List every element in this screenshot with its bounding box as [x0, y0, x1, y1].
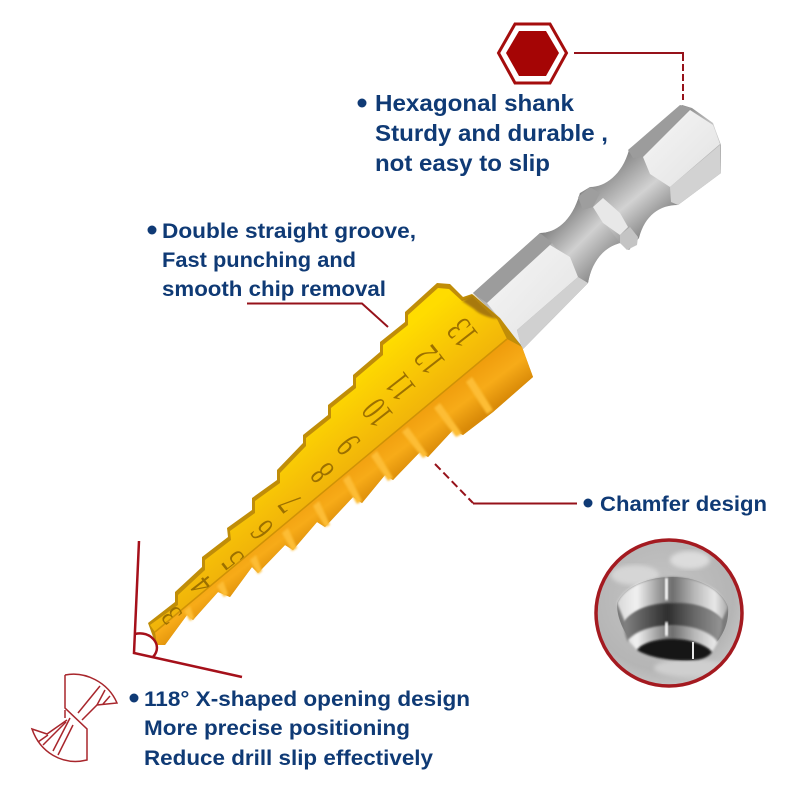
- upper bright step: [617, 577, 728, 622]
- text: 118 degree X-shaped opening callout: [130, 687, 470, 770]
- outer gold silhouette: [148, 283, 533, 645]
- text: double straight groove callout: [148, 220, 416, 301]
- leader line: chamfer: [435, 464, 577, 504]
- etched size numbers 3 to 13: 12: [405, 338, 453, 382]
- angle marker: 118 degree tip: [134, 541, 242, 677]
- etched size numbers 3 to 13: 3: [155, 600, 189, 630]
- text: 118 degree X-shaped opening callout: More precise positioning: [144, 716, 410, 740]
- drill bit: gold stepped cone: [148, 283, 533, 645]
- dark band: [624, 603, 722, 642]
- lower hex body: [473, 233, 552, 303]
- etched size numbers 3 to 13: 11: [376, 365, 424, 409]
- drill bit: hex shank: [473, 105, 721, 350]
- leader line: groove: [247, 304, 388, 327]
- lower stepped face: [155, 339, 533, 645]
- text: 118 degree X-shaped opening callout: 118° X-shaped opening design: [144, 687, 470, 711]
- lower bright step: [628, 625, 718, 652]
- bright upper face: [150, 288, 507, 632]
- etched size numbers 3 to 13: 7: [271, 486, 309, 520]
- etched size numbers 3 to 13: 10: [353, 391, 401, 435]
- text: 118 degree X-shaped opening callout: Reduce drill slip effectively: [144, 746, 433, 770]
- shank silhouette and neck: [473, 105, 721, 350]
- upper hex body: [628, 105, 691, 158]
- text: double straight groove callout: Fast punching and: [162, 249, 356, 272]
- hole opening: [617, 577, 728, 660]
- etched size numbers 3 to 13: 13: [438, 311, 486, 355]
- etched size numbers 3 to 13: 4: [184, 569, 220, 601]
- text: chamfer design: Chamfer design: [600, 492, 767, 516]
- text: hexagonal shank callout: Hexagonal shank: [375, 90, 574, 116]
- shadow recess at collar: [462, 295, 498, 319]
- text: double straight groove callout: smooth chip removal: [162, 278, 386, 301]
- text: hexagonal shank callout: not easy to slip: [375, 150, 550, 176]
- text: hexagonal shank callout: [358, 90, 608, 176]
- inset photo: chamfered hole: [596, 540, 742, 686]
- etched size numbers 3 to 13: [155, 311, 486, 630]
- black bore: [637, 639, 712, 660]
- text: double straight groove callout: Double straight groove,: [162, 220, 416, 243]
- icon: X-shaped opening cross-section: [32, 674, 117, 761]
- etched size numbers 3 to 13: 5: [214, 543, 252, 577]
- centre facets: [578, 187, 600, 210]
- icon: hexagon shank symbol: [498, 24, 566, 83]
- step bands: [184, 377, 493, 621]
- etched size numbers 3 to 13: 9: [328, 427, 368, 463]
- etched size numbers 3 to 13: 8: [302, 455, 342, 491]
- leader line: hexagon to shank: [574, 53, 684, 100]
- text: hexagonal shank callout: Sturdy and durable ,: [375, 120, 608, 146]
- etched size numbers 3 to 13: 6: [243, 513, 281, 547]
- groove edge highlight: [155, 339, 507, 632]
